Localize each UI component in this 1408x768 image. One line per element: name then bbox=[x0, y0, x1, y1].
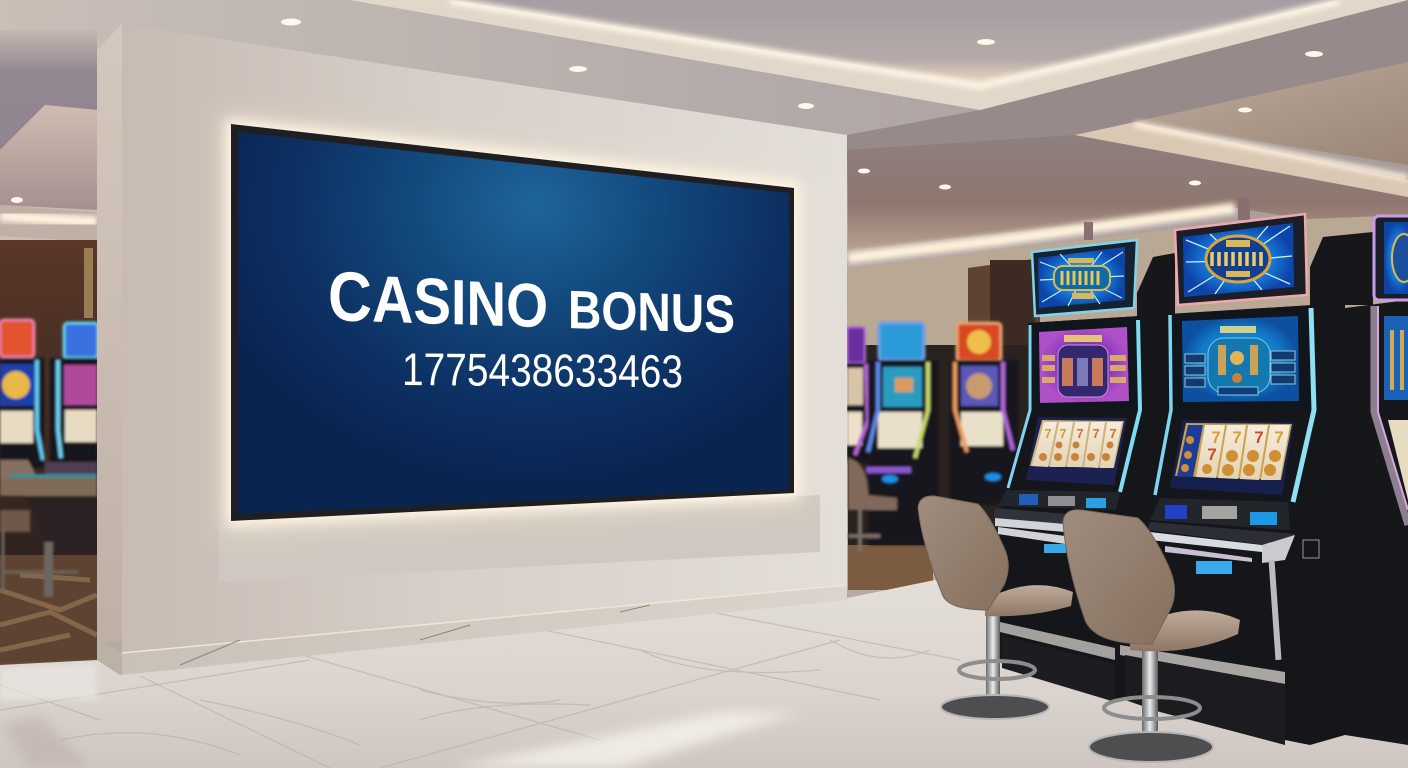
icon: machine reels: 7 bbox=[1076, 426, 1084, 441]
icon: machine reels bbox=[1170, 420, 1294, 495]
floor bbox=[0, 580, 1408, 768]
icon: machine topper screen bbox=[1032, 222, 1137, 316]
icon: machine game screen bbox=[1028, 316, 1140, 412]
chair left bbox=[918, 496, 1073, 719]
number text: 1775438633463 bbox=[402, 343, 683, 397]
icon: machine reels: 7 bbox=[1232, 428, 1242, 447]
icon: machine reels: 7 bbox=[1092, 426, 1100, 441]
left ceiling trays bbox=[0, 30, 97, 150]
icon: machine reels: 7 bbox=[1211, 428, 1221, 447]
pillar wall bbox=[97, 24, 847, 675]
ceiling downlights bbox=[11, 18, 1323, 203]
ceiling bbox=[0, 0, 1408, 300]
icon: machine reels: 7 bbox=[1254, 428, 1264, 447]
icon: machine reels: 7 bbox=[1274, 428, 1284, 447]
heading: casino bonus bbox=[328, 257, 735, 345]
background slot machines left bbox=[0, 320, 98, 597]
back walls and carpet bbox=[0, 215, 1408, 665]
icon: machine reels: 7 bbox=[1207, 445, 1217, 464]
main slot machine far right bbox=[1345, 216, 1408, 745]
icon: machine topper screen bbox=[1175, 198, 1307, 305]
wall screen bbox=[231, 124, 794, 521]
icon: machine reels: 7 bbox=[1109, 426, 1117, 441]
cove band bbox=[350, 0, 1408, 110]
main slot machine left bbox=[994, 222, 1175, 702]
background slot machines right bbox=[847, 323, 1018, 552]
heading: casino bonus: CASINO bbox=[328, 257, 548, 342]
icon: machine game screen bbox=[1169, 305, 1313, 412]
icon: machine reels: 7 bbox=[1059, 426, 1067, 441]
main slot machine right bbox=[1120, 198, 1373, 745]
marble baseboard bbox=[122, 585, 847, 675]
icon: machine reels: 7 bbox=[1044, 426, 1052, 441]
heading: casino bonus: BONUS bbox=[568, 280, 735, 345]
screen glow bbox=[222, 115, 804, 532]
icon: machine reels bbox=[1026, 417, 1127, 485]
chair right bbox=[1063, 510, 1240, 762]
